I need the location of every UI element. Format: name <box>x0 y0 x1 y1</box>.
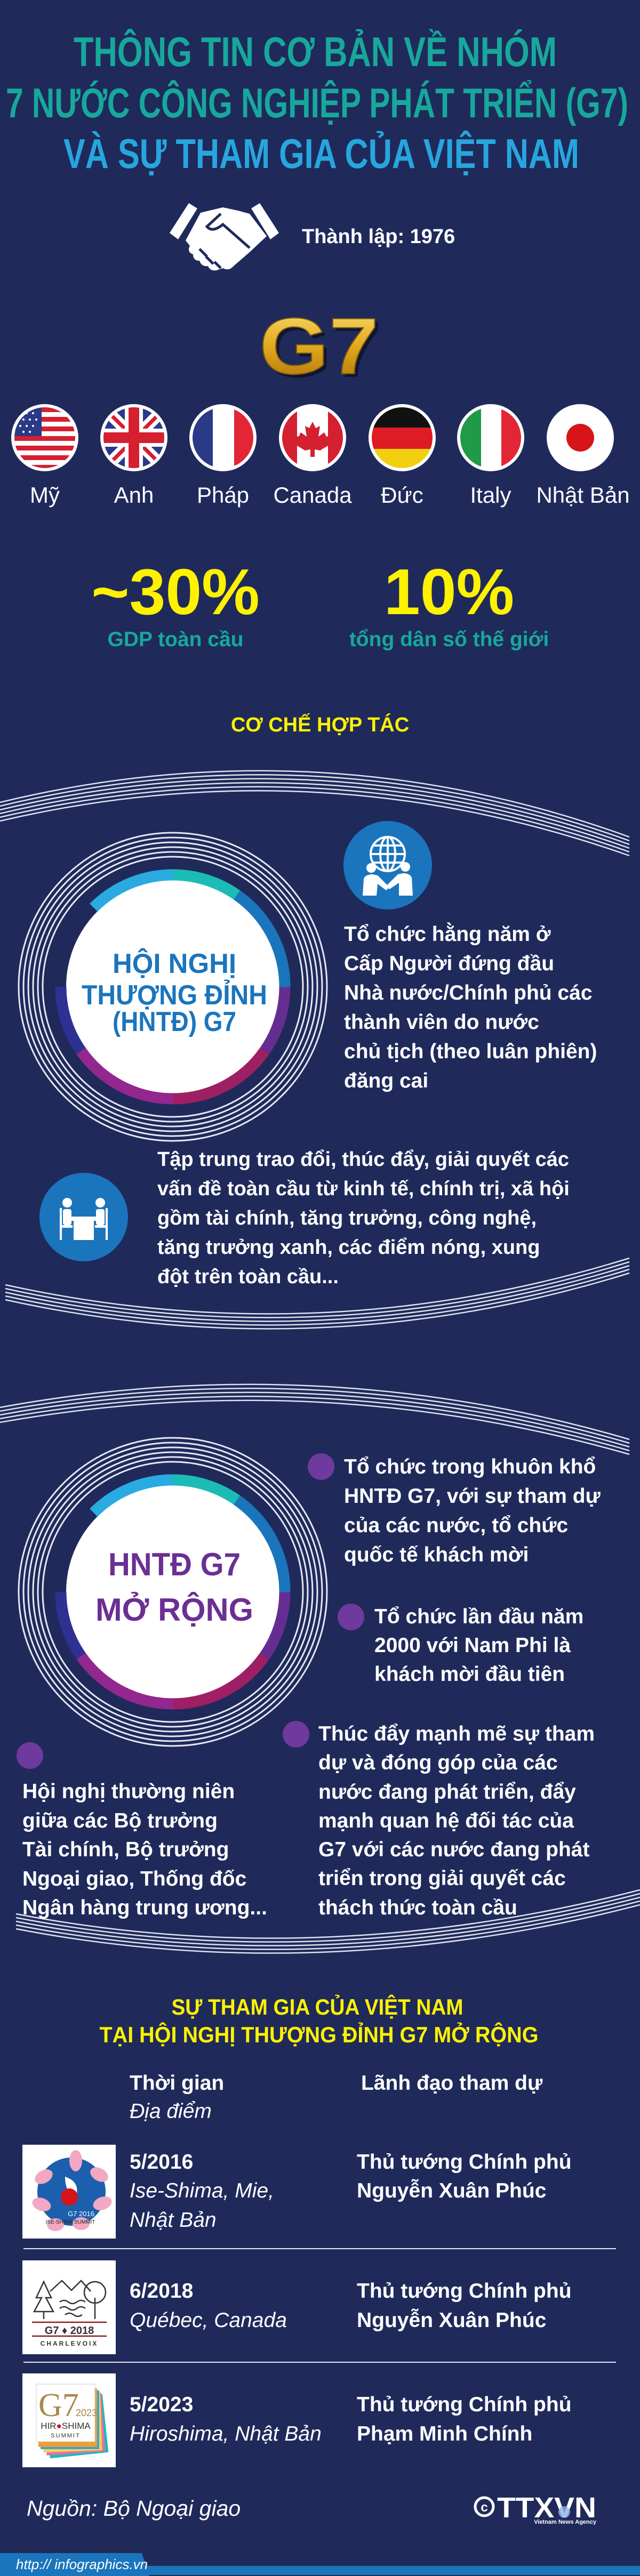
circle title: summit: HỘI NGHỊ <box>113 948 236 979</box>
logo: Charlevoix 2018: G7 ♦ 2018 <box>45 2325 94 2337</box>
flag: Germany <box>372 407 433 468</box>
bullet: first held: Tổ chức lần đầu năm <box>374 1605 583 1628</box>
country labels: Nhật Bản <box>536 482 630 508</box>
bullet: ministerial meetings: Hội nghị thường niên <box>22 1780 235 1803</box>
logo: Hiroshima 2023: HIR●SHIMA <box>41 2421 91 2431</box>
table header: Địa điểm <box>130 2100 212 2123</box>
footer bar <box>0 2553 640 2576</box>
stat: GDP: ~30% <box>91 556 260 628</box>
bullet: framework: HNTĐ G7, với sự tham dự <box>344 1485 601 1508</box>
flag: USA <box>14 407 75 468</box>
flag: France <box>193 409 253 466</box>
circle title: summit: (HNTĐ) G7 <box>113 1007 236 1037</box>
row: 2018: Québec, Canada <box>130 2309 287 2332</box>
circle title: summit: THƯỢNG ĐỈNH <box>82 979 267 1011</box>
stat: population: 10% <box>384 556 514 628</box>
bullet: first held <box>338 1604 583 1686</box>
flag: Japan <box>566 424 594 452</box>
bullet: developing countries <box>283 1721 595 1919</box>
panel: expanded G7 circle <box>18 1437 327 1746</box>
icon: meeting table <box>39 1173 128 1261</box>
text: summit annual: đăng cai <box>344 1069 428 1092</box>
bullet: developing countries: dự và đóng góp của các <box>318 1751 558 1774</box>
bullet: ministerial meetings <box>17 1742 267 1919</box>
text: summit annual: Tổ chức hằng năm ở <box>344 923 551 946</box>
bullet: developing countries: nước đang phát triển, đẩy <box>318 1781 576 1804</box>
row: 2016: Thủ tướng Chính phủ <box>357 2151 572 2174</box>
row: 2016: 5/2016 <box>130 2151 193 2174</box>
country labels: Mỹ <box>30 482 60 508</box>
country labels: Anh <box>114 482 154 508</box>
text: summit focus: gồm tài chính, tăng trưởng, công nghệ, <box>157 1207 537 1229</box>
text: summit annual: Cấp Người đứng đầu <box>344 952 554 975</box>
row: 2016: Ise-Shima, Mie, <box>130 2179 274 2202</box>
row: 2016: Nhật Bản <box>130 2209 217 2232</box>
country labels: Canada <box>273 482 352 508</box>
text: summit annual: Nhà nước/Chính phủ các <box>344 981 593 1004</box>
logo: Hiroshima 2023: 2023 <box>76 2408 97 2418</box>
row: 2023: Phạm Minh Chính <box>357 2422 532 2445</box>
bullet: developing countries: thách thức toàn cầu <box>318 1896 517 1919</box>
text: summit focus <box>157 1148 570 1288</box>
text: founded: Thành lập: 1976 <box>302 226 455 248</box>
text: summit annual: chủ tịch (theo luân phiên) <box>344 1040 597 1063</box>
logo: Hiroshima 2023 <box>22 2373 116 2467</box>
bullet: ministerial meetings: giữa các Bộ trưởng <box>22 1809 218 1832</box>
panel: G7 summit circle <box>18 832 327 1142</box>
footer url: http:// infographics.vn <box>16 2556 148 2572</box>
country labels: Pháp <box>197 482 249 508</box>
flag: Canada <box>282 412 343 464</box>
row: 2018 <box>22 2260 572 2354</box>
row: 2023: Thủ tướng Chính phủ <box>357 2393 572 2416</box>
logo: Charlevoix 2018: CHARLEVOIX <box>41 2340 98 2347</box>
text: summit focus: tăng trưởng xanh, các điểm nóng, xung <box>157 1236 540 1259</box>
bullet: ministerial meetings: Ngân hàng trung ương... <box>22 1896 267 1919</box>
flag: UK <box>103 407 164 468</box>
bullet: ministerial meetings: Tài chính, Bộ trưởng <box>22 1838 229 1861</box>
bullet: first held: khách mời đầu tiên <box>374 1663 565 1686</box>
text: summit annual: thành viên do nước <box>344 1011 539 1034</box>
bullet: developing countries: triển trong giải quyết các <box>318 1867 566 1890</box>
country labels: Đức <box>381 482 423 508</box>
bullet: developing countries: G7 với các nước đang phát <box>318 1838 590 1861</box>
logo: TTXVN: c <box>481 2500 488 2515</box>
row: 2018: Thủ tướng Chính phủ <box>357 2280 572 2303</box>
row: 2016 <box>22 2145 572 2239</box>
heading: cooperation mechanism: CƠ CHẾ HỢP TÁC <box>231 714 409 736</box>
bullet: first held: 2000 với Nam Phi là <box>374 1634 571 1657</box>
icon: handshake <box>170 203 279 271</box>
table header: Thời gian <box>130 2072 224 2095</box>
text: summit focus: vấn đề toàn cầu từ kinh tế, chính trị, xã hội <box>157 1178 570 1200</box>
row: 2016: Nguyễn Xuân Phúc <box>357 2179 546 2202</box>
bullet: framework <box>308 1453 601 1566</box>
stat: GDP: GDP toàn cầu <box>107 628 243 651</box>
text: summit annual <box>344 922 597 1092</box>
source: Nguồn: Bộ Ngoại giao <box>27 2496 241 2521</box>
bullet: ministerial meetings: Ngoại giao, Thống đốc <box>22 1867 246 1890</box>
bullet: framework: quốc tế khách mời <box>344 1543 529 1566</box>
circle title: expanded summit: HNTĐ G7 <box>108 1547 241 1582</box>
logo: Ise-Shima 2016 <box>22 2145 116 2239</box>
flag: Italy <box>460 409 521 466</box>
row: 2023: Hiroshima, Nhật Bản <box>130 2422 322 2445</box>
heading: Vietnam participation: SỰ THAM GIA CỦA VIỆT NAM <box>172 1994 463 2019</box>
logo: Charlevoix 2018 <box>22 2260 116 2354</box>
logo: Hiroshima 2023: SUMMIT <box>51 2433 81 2439</box>
title <box>6 28 628 177</box>
logo: Hiroshima 2023: G7 <box>38 2387 79 2424</box>
country labels <box>30 482 630 508</box>
text: summit focus: đột trên toàn cầu... <box>157 1266 339 1288</box>
text: summit focus: Tập trung trao đổi, thúc đẩy, giải quyết các <box>157 1148 569 1171</box>
stat: population <box>349 556 549 651</box>
row: 2023: 5/2023 <box>130 2393 193 2416</box>
icon: globe with people <box>343 821 432 909</box>
bullet: developing countries: Thúc đẩy mạnh mẽ sự tham <box>318 1722 595 1745</box>
logo: Ise-Shima 2016: G7 2016 <box>68 2210 94 2218</box>
row: 2018: Nguyễn Xuân Phúc <box>357 2309 546 2332</box>
bullet: developing countries: mạnh quan hệ đối tác của <box>318 1809 574 1832</box>
table header <box>130 2072 543 2123</box>
stat: population: tổng dân số thế giới <box>349 628 549 651</box>
circle title: summit <box>82 948 267 1037</box>
heading: Vietnam participation: TẠI HỘI NGHỊ THƯỢNG ĐỈNH G7 MỞ RỘNG <box>99 2022 539 2047</box>
heading: Vietnam participation <box>99 1994 539 2047</box>
table header: Lãnh đạo tham dự <box>361 2072 542 2095</box>
flags row <box>11 404 614 471</box>
logo: Ise-Shima 2016: ISE-SHIMA SUMMIT <box>46 2219 95 2225</box>
bullet: framework: của các nước, tổ chức <box>344 1514 568 1537</box>
bullet: framework: Tổ chức trong khuôn khổ <box>344 1455 596 1478</box>
country labels: Italy <box>470 482 511 508</box>
row: 2023 <box>22 2373 572 2467</box>
circle title: expanded summit: MỞ RỘNG <box>95 1592 253 1628</box>
row: 2018: 6/2018 <box>130 2280 193 2303</box>
circle title: expanded summit <box>95 1547 253 1628</box>
